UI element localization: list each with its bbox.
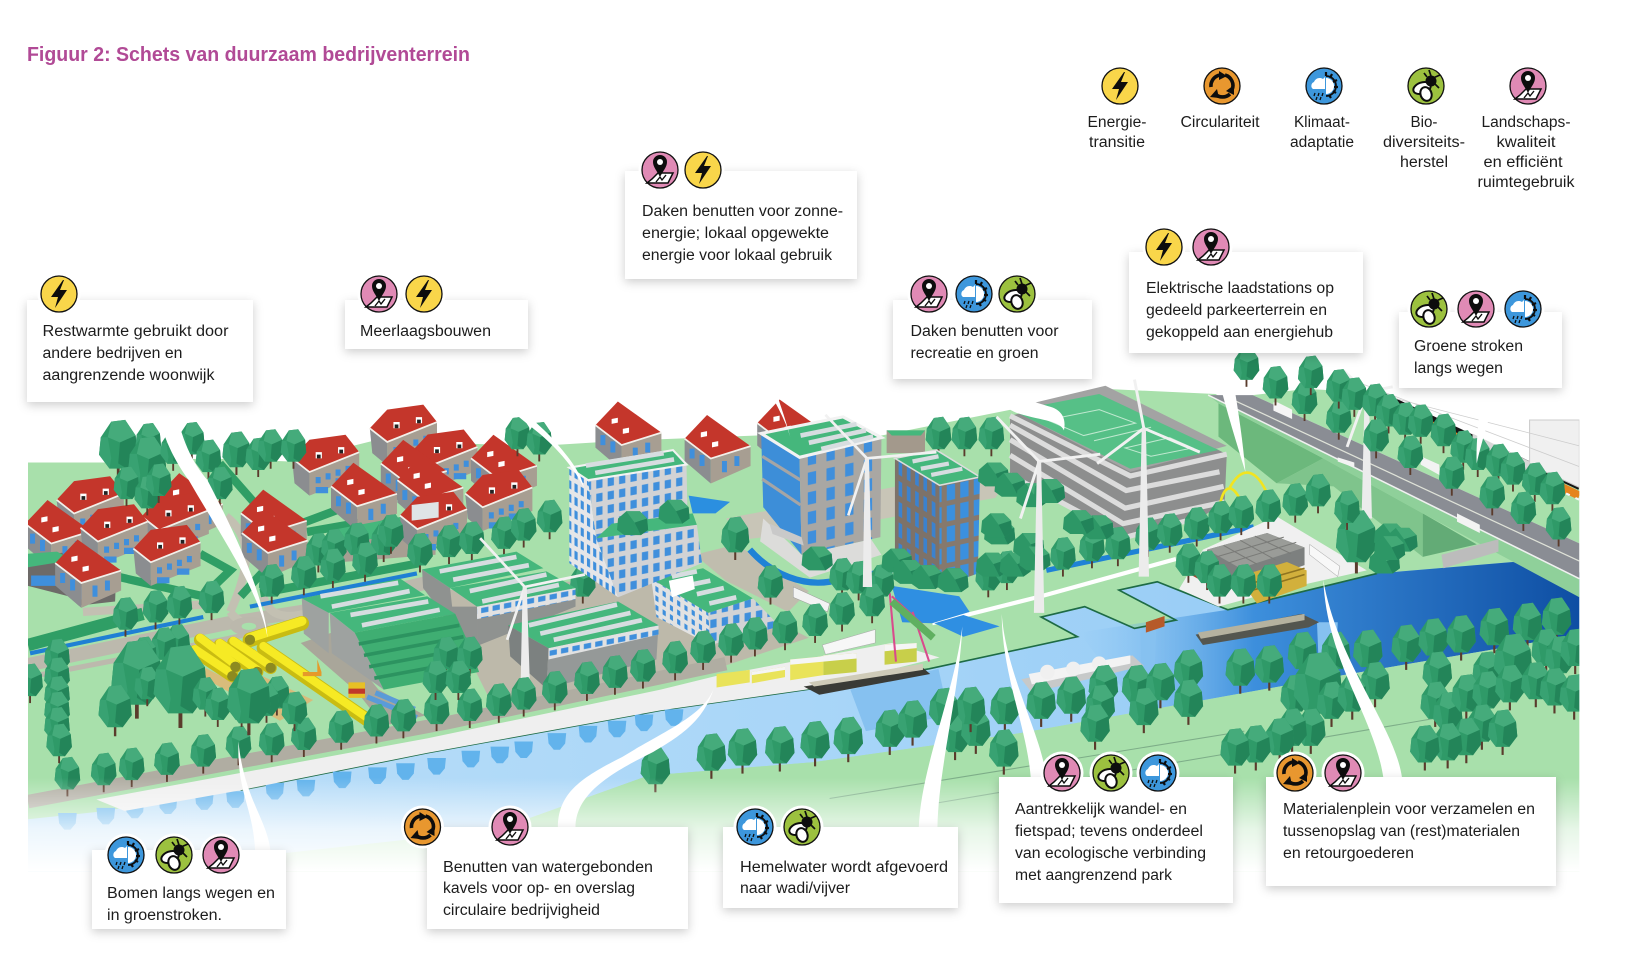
- white office with solar roof: [651, 568, 780, 645]
- large office A: [569, 450, 702, 597]
- callout: wandel- en fietspad: [999, 614, 1233, 903]
- callout: elektrische laadstations: gedeeld parkeerterrein en: [1146, 302, 1327, 319]
- callout: daken zonne-energie: energie voor lokaal gebruik: [642, 247, 832, 264]
- legend item: energietransitie: Energie-: [1088, 114, 1146, 131]
- callout: materialenplein: en retourgoederen: [1283, 845, 1414, 862]
- bottom fade: [0, 778, 1626, 871]
- callout: elektrische laadstations: gekoppeld aan energiehub: [1146, 324, 1333, 341]
- callout: restwarmte: Restwarmte gebruikt door: [42, 323, 228, 340]
- warehouses with solar roofs: [302, 552, 658, 718]
- callout: watergebonden kavels: Benutten van watergebonden: [443, 859, 653, 876]
- isometric scene illustration: [0, 347, 1626, 960]
- legend item: biodiversiteitsherstel: diversiteits-: [1383, 134, 1465, 151]
- legend item: circulariteit: Circulariteit: [1180, 114, 1260, 131]
- callout: hemelwater: Hemelwater wordt afgevoerd: [740, 859, 948, 876]
- legend item: klimaatadaptatie: [1290, 64, 1354, 151]
- callout: wandel- en fietspad: met aangrenzend park: [1015, 867, 1172, 884]
- callout: watergebonden kavels: kavels voor op- en overslag: [443, 880, 635, 897]
- ground: [28, 389, 1579, 881]
- legend item: energietransitie: [1088, 64, 1146, 151]
- waterway: [28, 562, 1579, 881]
- callout: materialenplein: [1266, 580, 1556, 886]
- callout: materialenplein: Materialenplein voor verzamelen en: [1283, 801, 1535, 818]
- legend item: klimaatadaptatie: adaptatie: [1290, 134, 1354, 151]
- callout: groene stroken: langs wegen: [1414, 360, 1503, 377]
- legend item: landschapskwaliteit: [1478, 64, 1575, 191]
- legend item: landschapskwaliteit: ruimtegebruik: [1478, 174, 1575, 191]
- callout: groene stroken: Groene stroken: [1414, 338, 1523, 355]
- background trees: [99, 417, 1004, 637]
- legend item: circulariteit: [1180, 64, 1260, 131]
- callout: watergebonden kavels: circulaire bedrijvigheid: [443, 902, 600, 919]
- callout: daken recreatie: [893, 272, 1092, 430]
- callout: bomen: [92, 741, 286, 929]
- foreground trees: [17, 347, 1590, 796]
- dock, containers and ships: [717, 587, 1319, 695]
- callout: elektrische laadstations: Elektrische laadstations op: [1146, 280, 1334, 297]
- quay: [96, 643, 940, 811]
- slim brown tower C: [895, 450, 980, 587]
- legend item: klimaatadaptatie: Klimaat-: [1294, 114, 1350, 131]
- highway embankment, bridge and train: [1208, 379, 1579, 597]
- callout: wandel- en fietspad: Aantrekkelijk wandel- en: [1015, 801, 1187, 818]
- callout: bomen: in groenstroken.: [107, 907, 222, 924]
- callout: daken zonne-energie: [625, 148, 857, 437]
- legend item: energietransitie: transitie: [1089, 134, 1145, 151]
- callout: hemelwater: [723, 626, 962, 908]
- callout: materialenplein: tussenopslag van (rest)materialen: [1283, 823, 1520, 840]
- callout: wandel- en fietspad: van ecologische verbinding: [1015, 845, 1206, 862]
- wind turbines: [480, 370, 1393, 686]
- legend item: landschapskwaliteit: Landschaps-: [1482, 114, 1570, 131]
- hedges and streams: [28, 464, 1254, 653]
- callout: groene stroken: [1399, 288, 1562, 464]
- callout: elektrische laadstations: [1129, 226, 1363, 472]
- callout: daken recreatie: Daken benutten voor: [910, 323, 1058, 340]
- legend item: landschapskwaliteit: en efficiënt: [1484, 154, 1563, 171]
- glass office B: [760, 417, 925, 578]
- legend item: landschapskwaliteit: kwaliteit: [1496, 134, 1556, 151]
- parking garage with sports field: [1010, 386, 1270, 537]
- callout: restwarmte: aangrenzende woonwijk: [42, 367, 215, 384]
- callout: restwarmte: andere bedrijven en: [42, 345, 182, 362]
- callout: meerlaagsbouwen: [345, 272, 584, 487]
- legend item: biodiversiteitsherstel: Bio-: [1410, 114, 1438, 131]
- callout: bomen: Bomen langs wegen en: [107, 885, 275, 902]
- material yard: [1179, 516, 1367, 607]
- scene side masks: [0, 353, 1626, 892]
- legend item: biodiversiteitsherstel: herstel: [1400, 154, 1448, 171]
- houses: [25, 399, 823, 608]
- callout: meerlaagsbouwen: Meerlaagsbouwen: [360, 323, 491, 340]
- callout: hemelwater: naar wadi/vijver: [740, 880, 850, 897]
- callout: daken zonne-energie: energie; lokaal opgewekte: [642, 225, 829, 242]
- legend: [1088, 64, 1575, 191]
- legend item: biodiversiteitsherstel: [1383, 64, 1465, 171]
- lower bank green: [498, 635, 1579, 892]
- callout: wandel- en fietspad: fietspad; tevens onderdeel: [1015, 823, 1203, 840]
- callout: restwarmte: [27, 272, 268, 638]
- yellow pipeline works: [187, 621, 367, 721]
- roads and plazas: [28, 472, 1011, 802]
- title: Figuur 2: Schets van duurzaam bedrijventerrein: [27, 44, 470, 66]
- callout: watergebonden kavels: [401, 686, 714, 929]
- callout: daken zonne-energie: Daken benutten voor zonne-: [642, 203, 843, 220]
- callout: daken recreatie: recreatie en groen: [910, 345, 1038, 362]
- trees near offices and garden: [758, 463, 1331, 623]
